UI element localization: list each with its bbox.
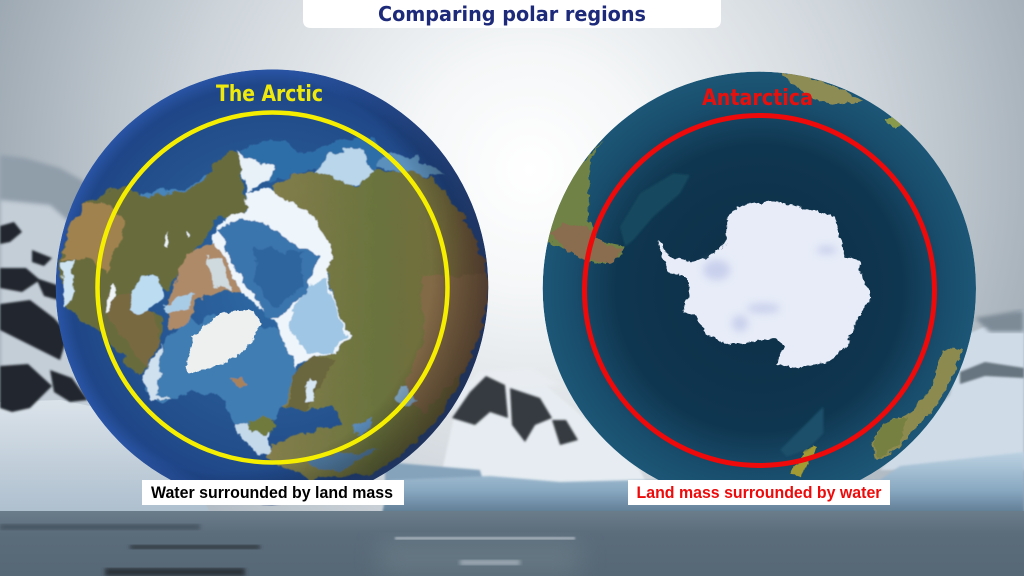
new zealand <box>790 447 817 477</box>
right mountains <box>880 310 1024 470</box>
title bar <box>303 0 721 28</box>
centre mountain <box>385 368 660 514</box>
heading: The Arctic: The Arctic <box>216 82 323 107</box>
glacier front <box>380 452 1024 522</box>
greenland <box>185 309 261 373</box>
deep arctic basin <box>217 218 318 320</box>
left snowy mountain <box>0 155 210 512</box>
panel: The Arctic globe <box>56 69 488 505</box>
north american land <box>60 152 250 377</box>
south america <box>547 140 625 265</box>
africa <box>778 72 863 104</box>
sea <box>0 511 1024 576</box>
iceland <box>231 377 248 388</box>
panel: Antarctica globe <box>543 72 976 505</box>
globe map <box>56 69 488 505</box>
canadian arctic islands <box>167 243 240 330</box>
caption: Arctic: Water surrounded by land mass <box>151 483 393 502</box>
snow patches <box>105 230 192 313</box>
australia <box>872 348 962 460</box>
north pacific shallow <box>240 138 383 183</box>
caption: Antarctica: Land mass surrounded by water <box>636 483 882 502</box>
bering shelf ice <box>237 152 273 193</box>
atlantic shelf <box>143 313 300 433</box>
heading: Antarctica: Antarctica <box>702 86 813 111</box>
british isles <box>250 413 275 435</box>
yellow ring <box>98 112 448 462</box>
arctic ice shelf <box>212 190 350 367</box>
globe map <box>543 72 976 505</box>
hudson bay <box>127 277 163 313</box>
eurasian land <box>267 170 488 480</box>
antarctica ice sheet <box>658 201 872 368</box>
title text: Comparing polar regions <box>378 2 646 26</box>
red ring <box>584 116 934 466</box>
shallow ridges <box>780 407 823 457</box>
terminator shading <box>140 73 488 506</box>
